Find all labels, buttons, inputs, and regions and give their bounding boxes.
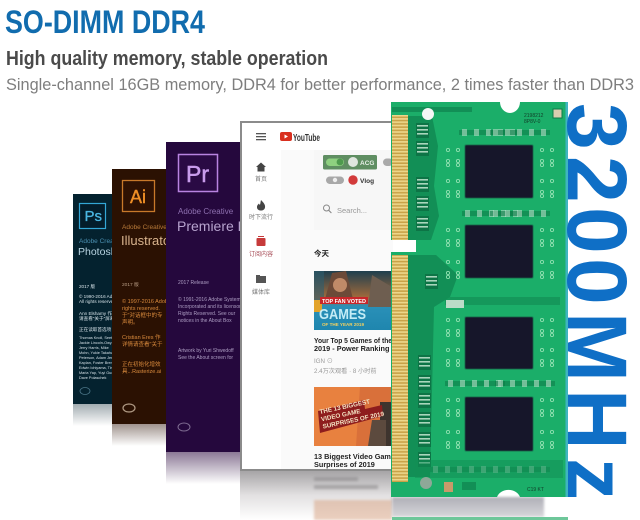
- icon: Pr cloud: [178, 423, 190, 431]
- module label codes: 2198212: [524, 113, 544, 119]
- Premiere name: [178, 208, 240, 231]
- Illustrator name: Adobe Creative: [122, 224, 167, 231]
- sidebar: subscriptions: 订阅内容: [249, 250, 273, 258]
- icon: menu: [256, 133, 266, 140]
- Illustrator notes: Cristian Eres 作: [122, 333, 161, 341]
- sidebar: home: [255, 162, 267, 183]
- icon: Ai cloud: [123, 404, 135, 412]
- subtitle: High quality memory, stable operation: [6, 48, 328, 70]
- Illustrator notes: [122, 282, 166, 374]
- memory chip 4: [465, 397, 533, 451]
- YouTube logo: [280, 132, 320, 144]
- icon: Ps cloud: [80, 388, 90, 394]
- heading: today: 今天: [314, 248, 329, 258]
- Photoshop name: [78, 238, 112, 255]
- thumbnail: games of the year: TOP FAN VOTED: [322, 299, 366, 305]
- Illustrator notes: © 1997-2016 Adobe: [122, 298, 171, 305]
- Photoshop notes: Kaplan, Foster Brereton: [79, 361, 119, 365]
- Premiere notes: © 1991-2016 Adobe Systems: [178, 296, 244, 303]
- Photoshop notes: Thomas Knoll, Seetharaman: [79, 336, 127, 340]
- sidebar: home: 首页: [255, 175, 267, 183]
- Photoshop notes: Jackie Lincoln-Owyang: [79, 341, 118, 345]
- YouTube logo: YouTube: [293, 133, 320, 144]
- Illustrator notes: 正在初始化增效: [122, 360, 161, 368]
- thumbnail: video game surprises: THE 13 BIGGEST: [319, 398, 371, 416]
- thumbnail: video game surprises: VIDEO GAME: [321, 408, 361, 423]
- video meta 1: [314, 358, 377, 375]
- module label codes: C19 KT: [527, 487, 544, 493]
- icon: Pr logo: Pr: [186, 161, 209, 187]
- thumbnail: games of the year: [314, 271, 392, 330]
- Illustrator name: [122, 224, 166, 245]
- Illustrator notes: 详情请查看"关于: [122, 340, 163, 348]
- via pads: [446, 148, 554, 449]
- thumbnail: games of the year: GAMES: [319, 307, 366, 323]
- PCB top edge shadow: [392, 107, 472, 112]
- video meta 1: IGN ⊙: [314, 358, 333, 365]
- search box: Search...: [337, 206, 367, 215]
- solder rows: [415, 129, 563, 478]
- Photoshop notes: Maria Yap, Yuyi Guo: [79, 371, 113, 375]
- Photoshop notes: Ann Elshamy 作: [79, 310, 112, 317]
- Illustrator name: Illustrator: [121, 233, 175, 248]
- Photoshop notes: Mohn, Yukie Takahashi: [79, 351, 118, 355]
- Photoshop notes: All rights reserved: [79, 299, 116, 304]
- Photoshop notes: Jerry Harris, Mike: [79, 346, 109, 350]
- corner pad: [553, 109, 562, 118]
- module label codes: [524, 113, 544, 493]
- video meta 1: 2.4万次观看 · 8 小时前: [314, 367, 377, 375]
- Photoshop notes: 请查看"关于"屏幕: [79, 315, 115, 322]
- sidebar: trending: [249, 200, 273, 221]
- PCB edge highlight: [566, 102, 568, 497]
- memory module: [391, 102, 568, 497]
- module label codes: 8P8V-0: [524, 119, 541, 125]
- Premiere notes: Rights Reserved. See our: [178, 311, 236, 317]
- memory chip 1: [465, 145, 533, 198]
- sidebar: trending: 时下流行: [249, 213, 273, 221]
- left edge circuitry: [408, 116, 458, 477]
- Photoshop name: Adobe Creative: [79, 238, 124, 245]
- toggle: ACG: ACG: [360, 160, 374, 167]
- Premiere notes: Incorporated and its licensors.: [178, 304, 245, 310]
- thumbnail: video game surprises: [314, 387, 392, 446]
- Premiere notes: notices in the About Box: [178, 318, 232, 324]
- memory chip 2: [465, 225, 533, 278]
- panel: YouTube window: [240, 121, 395, 471]
- reflection: memory module: [392, 497, 544, 517]
- icon: Ps logo: Ps: [84, 208, 102, 225]
- bottom pads: [420, 477, 476, 492]
- Photoshop notes: [79, 284, 112, 379]
- Premiere name: Adobe Creative: [178, 207, 234, 216]
- video title 1: 2019 - Power Ranking: [314, 344, 389, 353]
- video title 1: [314, 336, 392, 353]
- content background: [281, 150, 393, 469]
- panel: Photoshop splash: [73, 194, 112, 404]
- icon: Ai logo: Ai: [130, 187, 146, 207]
- Premiere name: Premiere Pro: [177, 218, 260, 234]
- Premiere notes: 2017 Release: [178, 280, 209, 286]
- memory chip 3: [465, 317, 533, 369]
- sidebar: library: 媒体库: [252, 288, 270, 296]
- panel: Illustrator splash: [112, 169, 166, 424]
- title: SO-DIMM DDR4: [5, 4, 205, 40]
- mounting hole: [422, 108, 434, 120]
- Photoshop notes: 2017 版: [79, 283, 95, 290]
- Illustrator notes: 2017 版: [122, 281, 139, 288]
- PCB: [391, 102, 568, 497]
- video title 2: Surprises of 2019: [314, 460, 375, 469]
- search card: [314, 150, 393, 230]
- Photoshop notes: Dave Polaschek: [79, 376, 107, 380]
- Illustrator notes: 具...Rasterize.ai: [122, 368, 161, 375]
- Photoshop notes: 正在读取首选项: [79, 326, 112, 333]
- video title 1: Your Top 5 Games of the: [314, 336, 392, 345]
- reflection: software cards: [73, 402, 240, 484]
- Illustrator notes: rights reserved.: [122, 306, 160, 312]
- Photoshop notes: Peterson, Adam Jerugim: [79, 356, 121, 360]
- video title 2: [314, 452, 395, 469]
- thumbnail: games of the year: OF THE YEAR 2019: [322, 322, 364, 328]
- Photoshop name: Photoshop: [78, 246, 128, 258]
- Premiere notes: [178, 280, 245, 361]
- icon: Pr logo: [178, 154, 218, 192]
- icon: Ps logo: [80, 204, 106, 228]
- sidebar: subscriptions: [249, 236, 273, 258]
- reflection: YouTube window: [240, 470, 392, 520]
- Illustrator notes: 于"对话框中的专: [122, 311, 163, 319]
- description: Single-channel 16GB memory, DDR4 for better performance, 2 times faster than DDR3: [6, 76, 634, 94]
- gold contacts lower: [392, 255, 408, 482]
- toggle: Vlog: Vlog: [360, 178, 374, 185]
- thumbnail: video game surprises: SURPRISES OF 2019: [322, 411, 385, 431]
- gold contacts upper: [392, 115, 408, 240]
- panel: Premiere splash: [166, 142, 240, 452]
- Premiere notes: Artwork by Yuri Shwedoff: [178, 348, 234, 354]
- mirrored text reflection: [314, 477, 392, 520]
- video title 2: 13 Biggest Video Game: [314, 452, 395, 461]
- Premiere notes: See the About screen for: [178, 355, 233, 361]
- Photoshop notes: © 1990-2016 Adobe: [79, 293, 120, 299]
- sidebar: library: [252, 275, 270, 296]
- Photoshop notes: Edwin Ichiyama, Tim: [79, 366, 114, 370]
- icon: Ai logo: [122, 180, 154, 212]
- Illustrator notes: 声明。: [122, 318, 139, 326]
